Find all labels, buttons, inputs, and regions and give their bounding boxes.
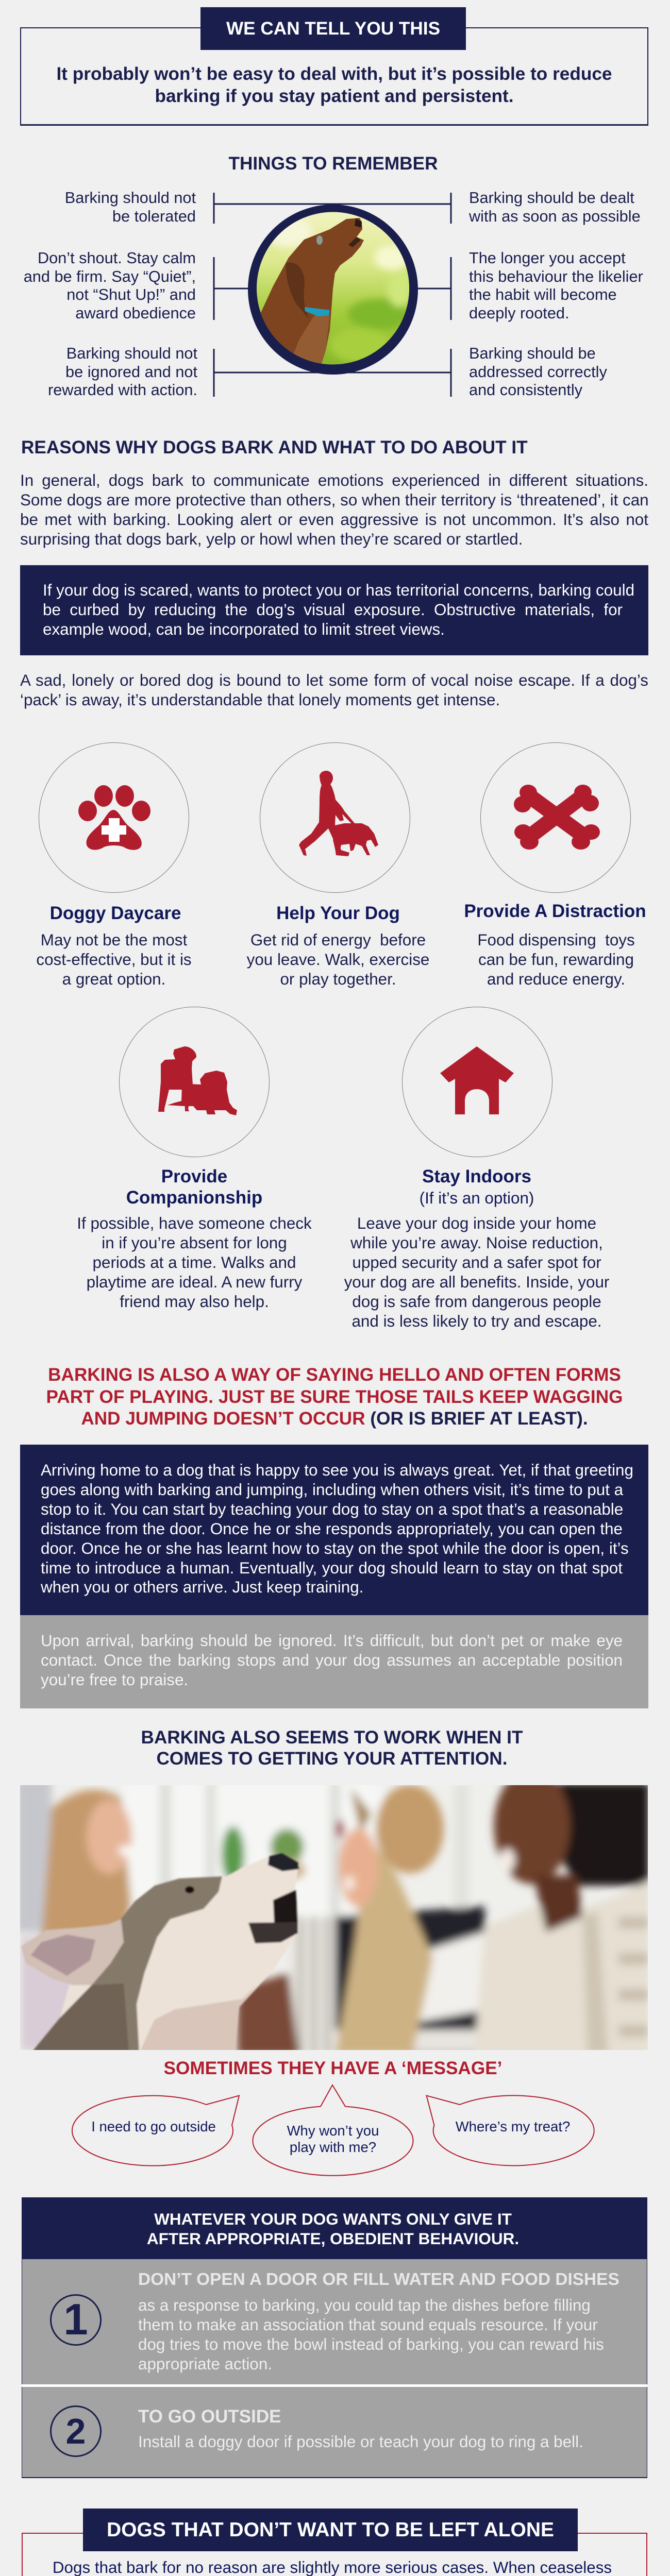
card: provide companionship bbox=[65, 1007, 323, 1336]
card title: (If it’s an option) bbox=[420, 1189, 534, 1207]
panel: greeting training: distance from the door. Once he or she responds appropriately, you can open the bbox=[41, 1520, 623, 1538]
number badge 1: 1 bbox=[63, 2295, 88, 2344]
text block: lonely dogs: A sad, lonely or bored dog is bound to let some form of vocal noise escape. If a dog’s bbox=[20, 671, 648, 689]
callout: not ignored bbox=[48, 344, 197, 399]
text block: general reasons: be met with barking. Looking alert or even aggressive is not uncommon. It’s also not bbox=[20, 511, 648, 529]
callout: not ignored: be ignored and not bbox=[65, 363, 197, 380]
heading: barking as hello: BARKING IS ALSO A WAY OF SAYING HELLO AND OFTEN FORMS bbox=[48, 1365, 621, 1385]
icon: crossed bones bbox=[481, 742, 631, 893]
heading box: WE CAN TELL YOU THIS bbox=[226, 19, 440, 39]
panel: ignore barking on arrival: contact. Once the barking stops and your dog assumes an acceptable position bbox=[41, 1651, 623, 1669]
panel: greeting training: door. Once he or she has learnt how to stay on the spot while the door is open, it’s bbox=[41, 1539, 629, 1557]
callout: not ignored: rewarded with action. bbox=[48, 381, 197, 399]
callout: habit rooted: deeply rooted. bbox=[469, 304, 569, 321]
panel: greeting training: time to introduce a human. Eventually, your dog should learn to stay on that spot bbox=[41, 1559, 623, 1577]
card text: you leave. Walk, exercise bbox=[247, 951, 429, 969]
callout: should not be tolerated bbox=[65, 189, 196, 225]
callout: do not shout: not “Shut Up!” and bbox=[66, 285, 196, 303]
icon: dog kennel bbox=[402, 1007, 552, 1157]
number badge 2 bbox=[50, 2405, 102, 2457]
card text: periods at a time. Walks and bbox=[93, 1253, 296, 1272]
panel header: AFTER APPROPRIATE, OBEDIENT BEHAVIOUR. bbox=[147, 2229, 519, 2248]
callout: correct and consistent: addressed correctly bbox=[469, 363, 607, 380]
text block: general reasons bbox=[20, 471, 649, 548]
card text: while you’re away. Noise reduction, bbox=[350, 1234, 603, 1252]
panel: ignore barking on arrival: Upon arrival, barking should be ignored. It’s difficult, but don’t pet or make eye bbox=[41, 1632, 623, 1650]
panel: dogs that do not want to be left alone bbox=[22, 2509, 647, 2576]
card text: friend may also help. bbox=[120, 1293, 269, 1311]
card text: your dog are all benefits. Inside, your bbox=[344, 1273, 609, 1291]
card text: Get rid of energy before bbox=[250, 931, 426, 949]
card text: upped security and a safer spot for bbox=[352, 1253, 601, 1272]
card text: playtime are ideal. A new furry bbox=[87, 1273, 302, 1291]
panel: ignore barking on arrival: you’re free to praise. bbox=[41, 1671, 188, 1689]
white gap between steps bbox=[22, 2384, 647, 2387]
card text bbox=[65, 1214, 323, 1312]
bubble: play with me bbox=[250, 2083, 417, 2179]
intro statement bbox=[57, 64, 612, 106]
callout: do not shout: Don’t shout. Stay calm bbox=[38, 249, 196, 267]
text block: lonely dogs bbox=[20, 671, 648, 709]
callout: not ignored: Barking should not bbox=[66, 344, 197, 362]
card text: Leave your dog inside your home bbox=[357, 1214, 596, 1232]
panel frame bbox=[22, 2533, 647, 2576]
callout: deal with it soon: with as soon as possible bbox=[469, 207, 641, 225]
card title: Help Your Dog bbox=[276, 903, 400, 923]
card text: a great option. bbox=[62, 970, 165, 988]
card text bbox=[244, 930, 432, 989]
card text: Food dispensing toys bbox=[477, 931, 635, 949]
text block: lonely dogs: ‘pack’ is away, it’s understandable that lonely moments get intense. bbox=[20, 691, 500, 709]
callout: do not shout: award obedience bbox=[75, 304, 196, 321]
callout: visual exposure bbox=[20, 565, 648, 655]
text block: general reasons: surprising that dogs bark, yelp or howl when they’re scared or startled. bbox=[20, 530, 523, 548]
step 2 title: TO GO OUTSIDE bbox=[138, 2406, 281, 2427]
icon: two dogs bbox=[119, 1007, 270, 1157]
panel: we can tell you this bbox=[20, 7, 648, 126]
heading: barking as hello: AND JUMPING DOESN’T OCCUR (OR IS BRIEF AT LEAST). bbox=[81, 1409, 588, 1429]
card title bbox=[65, 1166, 323, 1208]
card text bbox=[462, 930, 650, 989]
card text: If possible, have someone check bbox=[77, 1214, 312, 1232]
speech bubbles bbox=[70, 2081, 598, 2179]
callout: habit rooted: The longer you accept bbox=[469, 249, 626, 267]
heading: getting your attention: BARKING ALSO SEEMS TO WORK WHEN IT bbox=[141, 1727, 523, 1748]
heading: reasons why dogs bark: REASONS WHY DOGS BARK AND WHAT TO DO ABOUT IT bbox=[21, 437, 528, 457]
panel: ignore barking on arrival bbox=[20, 1615, 648, 1708]
bubble: go outside: I need to go outside bbox=[91, 2119, 216, 2134]
callout: deal with it soon bbox=[469, 189, 641, 225]
step 2 text: Install a doggy door if possible or teach your dog to ring a bell. bbox=[138, 2433, 583, 2451]
panel: greeting training: Arriving home to a dog that is happy to see you is always great. Yet, if that greeting bbox=[41, 1461, 633, 1479]
heading box: DOGS THAT DON’T WANT TO BE LEFT ALONE bbox=[107, 2519, 554, 2541]
callout: should not be tolerated: be tolerated bbox=[112, 207, 196, 225]
heading: things to remember: THINGS TO REMEMBER bbox=[229, 154, 438, 174]
card text: and reduce energy. bbox=[487, 970, 625, 988]
callout: visual exposure: example wood, can be incorporated to limit street views. bbox=[43, 620, 445, 638]
heading: getting your attention bbox=[0, 1727, 664, 1769]
step 2 bbox=[22, 2387, 647, 2478]
card text: dog is safe from dangerous people bbox=[352, 1293, 601, 1311]
card: help your dog bbox=[241, 742, 429, 995]
card text: or play together. bbox=[280, 970, 396, 988]
text block: general reasons: In general, dogs bark to communicate emotions experienced in different situations. bbox=[20, 471, 648, 489]
callout: habit rooted bbox=[469, 249, 643, 321]
bubble: play with me: Why won’t you bbox=[287, 2123, 379, 2139]
heading box bbox=[83, 2509, 578, 2551]
panel frame bbox=[20, 27, 648, 126]
card title: Provide A Distraction bbox=[464, 901, 646, 921]
panel header: WHATEVER YOUR DOG WANTS ONLY GIVE IT bbox=[154, 2210, 512, 2228]
step 1 title: DON’T OPEN A DOOR OR FILL WATER AND FOOD DISHES bbox=[138, 2270, 619, 2289]
bubble: go outside bbox=[70, 2094, 242, 2168]
callout: visual exposure: If your dog is scared, wants to protect you or has territorial concerns, barking could bbox=[43, 581, 634, 599]
card: doggy daycare bbox=[36, 742, 192, 988]
bubble: play with me: play with me? bbox=[290, 2139, 376, 2155]
heading: sometimes they have a message: SOMETIMES THEY HAVE A ‘MESSAGE’ bbox=[164, 2058, 502, 2078]
step 1 bbox=[22, 2259, 647, 2384]
photo: dog howling with three women bbox=[20, 1785, 648, 2050]
bubble: treat bbox=[425, 2094, 598, 2168]
callout: do not shout bbox=[24, 249, 196, 321]
callout: correct and consistent: Barking should be bbox=[469, 344, 596, 362]
card text: cost-effective, but it is bbox=[36, 951, 192, 969]
panel: greeting training: stop to it. You can start by teaching your dog to stay on a spot that’s a reasonable bbox=[41, 1500, 623, 1518]
callout: correct and consistent bbox=[469, 344, 607, 399]
step 1 text: dog tries to move the bowl instead of barking, you can reward his bbox=[138, 2335, 604, 2353]
card text: can be fun, rewarding bbox=[478, 951, 634, 969]
callout: habit rooted: the habit will become bbox=[469, 285, 617, 303]
intro statement: barking if you stay patient and persistent. bbox=[155, 86, 514, 106]
card title: Stay Indoors bbox=[422, 1166, 531, 1187]
panel header bbox=[22, 2197, 647, 2259]
heading: getting your attention: COMES TO GETTING YOUR ATTENTION. bbox=[157, 1749, 507, 1769]
icon: person walking a dog bbox=[260, 742, 410, 893]
callout: correct and consistent: and consistently bbox=[469, 381, 582, 399]
card text bbox=[36, 931, 192, 988]
callout: do not shout: and be firm. Say “Quiet”, bbox=[24, 267, 196, 285]
panel: only give after obedient behaviour bbox=[22, 2197, 647, 2479]
callout: deal with it soon: Barking should be dealt bbox=[469, 189, 634, 207]
number badge 1 bbox=[50, 2294, 102, 2346]
card text: May not be the most bbox=[41, 931, 187, 949]
callouts: right column bbox=[469, 189, 643, 399]
icon: paw with medical cross bbox=[39, 742, 189, 893]
heading: barking as hello: PART OF PLAYING. JUST BE SURE THOSE TAILS KEEP WAGGING bbox=[46, 1387, 623, 1406]
anxiety text: Dogs that bark for no reason are slightly more serious cases. When ceaseless bbox=[53, 2558, 612, 2576]
callout: should not be tolerated: Barking should not bbox=[65, 189, 196, 207]
callout: habit rooted: this behaviour the likelier bbox=[469, 267, 643, 285]
card title: Doggy Daycare bbox=[50, 903, 181, 923]
heading: barking as hello bbox=[0, 1364, 669, 1430]
card: provide a distraction bbox=[462, 742, 650, 995]
panel: greeting training: goes along with barking and jumping, including when others visit, it’s time to put a bbox=[41, 1481, 623, 1499]
card: stay indoors bbox=[343, 1007, 611, 1336]
heading box bbox=[200, 7, 466, 50]
step 1 text bbox=[138, 2296, 604, 2374]
card text: and is less likely to try and escape. bbox=[351, 1312, 602, 1330]
step 1 text: appropriate action. bbox=[138, 2355, 272, 2373]
step 1 text: as a response to barking, you could tap the dishes before filling bbox=[138, 2296, 591, 2314]
number badge 2: 2 bbox=[66, 2411, 86, 2451]
card text bbox=[343, 1214, 611, 1331]
card title bbox=[343, 1166, 611, 1209]
card title: Provide bbox=[161, 1166, 227, 1187]
panel: greeting training: when you or others arrive. Just keep training. bbox=[41, 1578, 363, 1596]
text block: general reasons: Some dogs are more protective than others, so when their territory is ‘threatened’, it can bbox=[20, 491, 649, 509]
step 1 text: them to make an association that sound equals resource. If your bbox=[138, 2316, 598, 2334]
bubble: treat: Where’s my treat? bbox=[456, 2119, 570, 2134]
panel: greeting training bbox=[20, 1445, 648, 1615]
intro statement: It probably won’t be easy to deal with, but it’s possible to reduce bbox=[57, 64, 612, 84]
card text: in if you’re absent for long bbox=[102, 1234, 287, 1252]
callouts: left column bbox=[24, 189, 197, 399]
diagram: bracket lines and dog medallion bbox=[213, 193, 451, 397]
card title: Companionship bbox=[126, 1188, 262, 1208]
callout: visual exposure: be curbed by reducing the dog’s visual exposure. Obstructive materials, for bbox=[43, 601, 623, 619]
